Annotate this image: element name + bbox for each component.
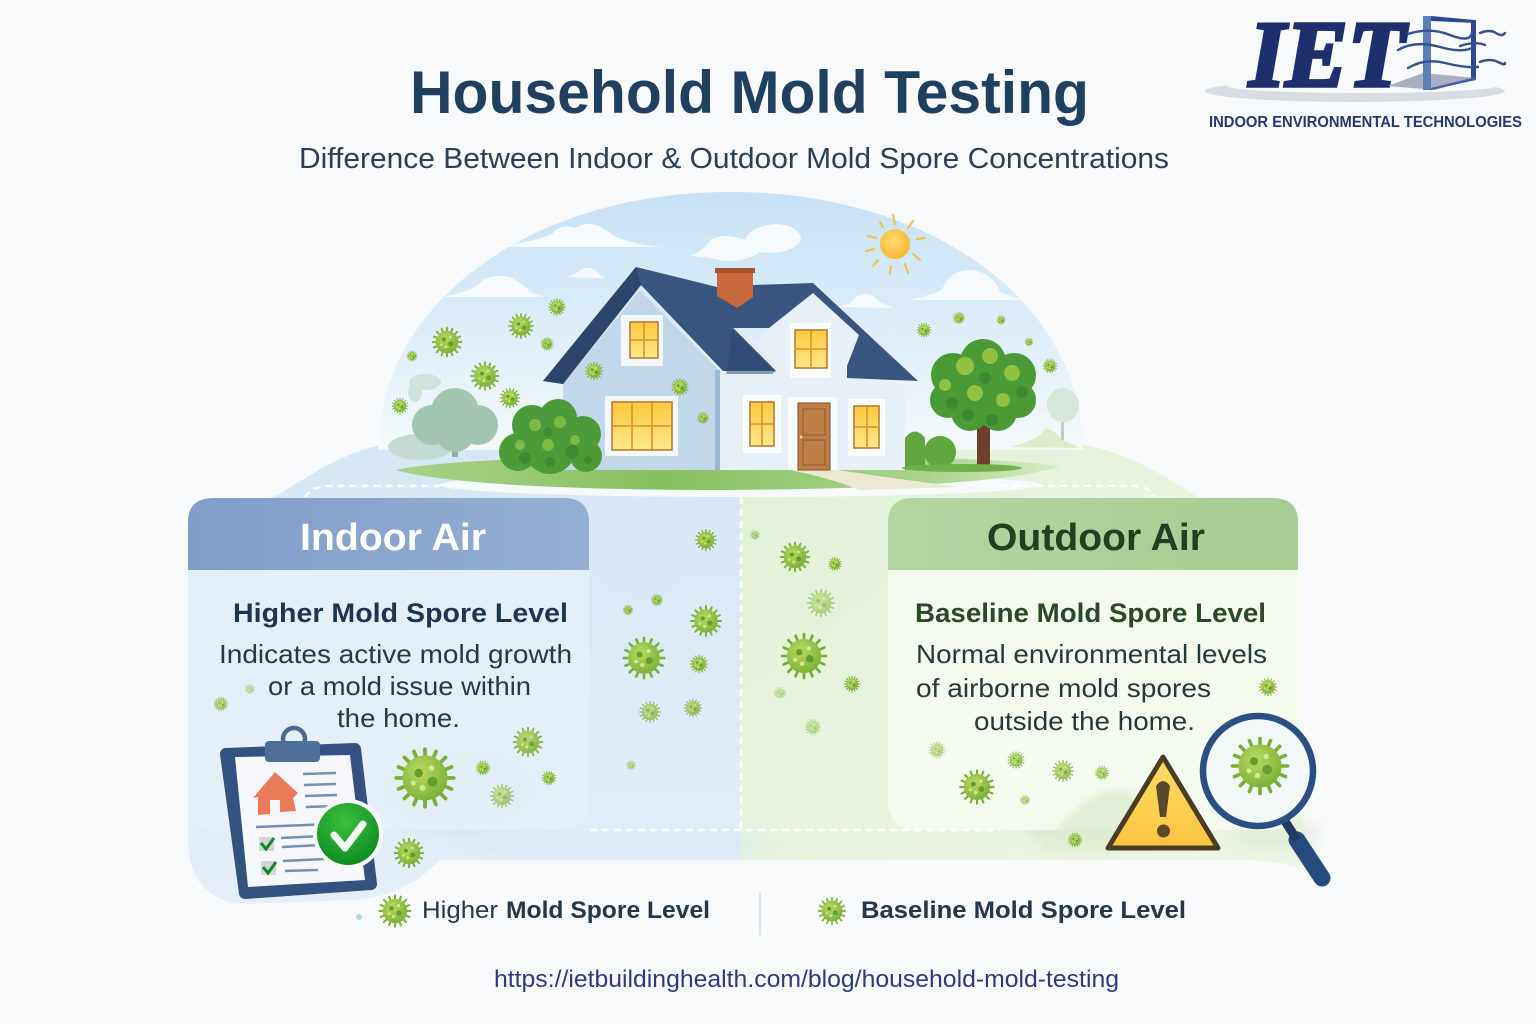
chimney [717, 272, 753, 308]
subheading: Higher Mold Spore Level [233, 598, 568, 628]
IET logo [1205, 3, 1522, 131]
header band [888, 498, 1298, 570]
icon: green check badge [313, 799, 383, 869]
airborne spores around the house [392, 299, 1057, 424]
card body [188, 570, 589, 830]
lawn [395, 457, 1060, 490]
green side bushes [905, 432, 956, 470]
white strip under lawn [440, 473, 1040, 497]
description: the home. [337, 703, 460, 733]
legend: baseline level: Baseline Mold Spore Level [861, 897, 1186, 924]
description: of airborne mold spores [916, 673, 1211, 703]
panel: outdoor background area [741, 444, 1325, 882]
icon: warning triangle [1108, 757, 1218, 848]
legend [356, 892, 1186, 935]
legend: higher level: Mold Spore Level [506, 897, 710, 924]
description: or a mold issue within [268, 671, 531, 701]
dashed dividers [305, 486, 1155, 830]
right tree [930, 339, 1036, 469]
icon: clipboard checklist [226, 728, 383, 893]
IET logo: IET [1248, 3, 1409, 107]
soft spore haze [380, 535, 1320, 854]
description [219, 639, 572, 733]
outdoor spores [750, 530, 1277, 847]
description: Indicates active mold growth [219, 639, 572, 669]
panel: Indoor Air [188, 498, 589, 830]
description [916, 639, 1267, 736]
legend: higher level [356, 895, 710, 927]
source URL: https://ietbuildinghealth.com/blog/household-mold-testing [494, 966, 1119, 993]
sun [866, 215, 925, 274]
clouds [443, 224, 1022, 308]
windows [621, 315, 663, 366]
illustration: sky dome with house [378, 192, 1083, 497]
door [788, 397, 837, 470]
header band [188, 498, 589, 570]
description: outside the home. [974, 706, 1195, 736]
subheading: Baseline Mold Spore Level [915, 598, 1266, 628]
subtitle: Difference Between Indoor & Outdoor Mold Spore Concentrations [299, 143, 1169, 175]
panel: Outdoor Air [888, 498, 1298, 830]
legend: higher level: Higher [422, 897, 498, 924]
sky dome [378, 192, 1083, 450]
panel: indoor background area [188, 444, 741, 904]
indoor spores [214, 530, 721, 867]
shrubs and trees [499, 339, 1036, 474]
title: Household Mold Testing [410, 59, 1089, 126]
icon: magnifying glass [1203, 716, 1322, 878]
card body [888, 570, 1298, 830]
heading: Outdoor Air [987, 517, 1205, 559]
garden path [790, 470, 960, 490]
heading: Indoor Air [300, 517, 486, 559]
house [543, 267, 918, 470]
description: Normal environmental levels [916, 639, 1267, 669]
outdoor card hill [1040, 790, 1200, 850]
faded background tree [388, 374, 1080, 460]
left shrub [499, 399, 602, 474]
